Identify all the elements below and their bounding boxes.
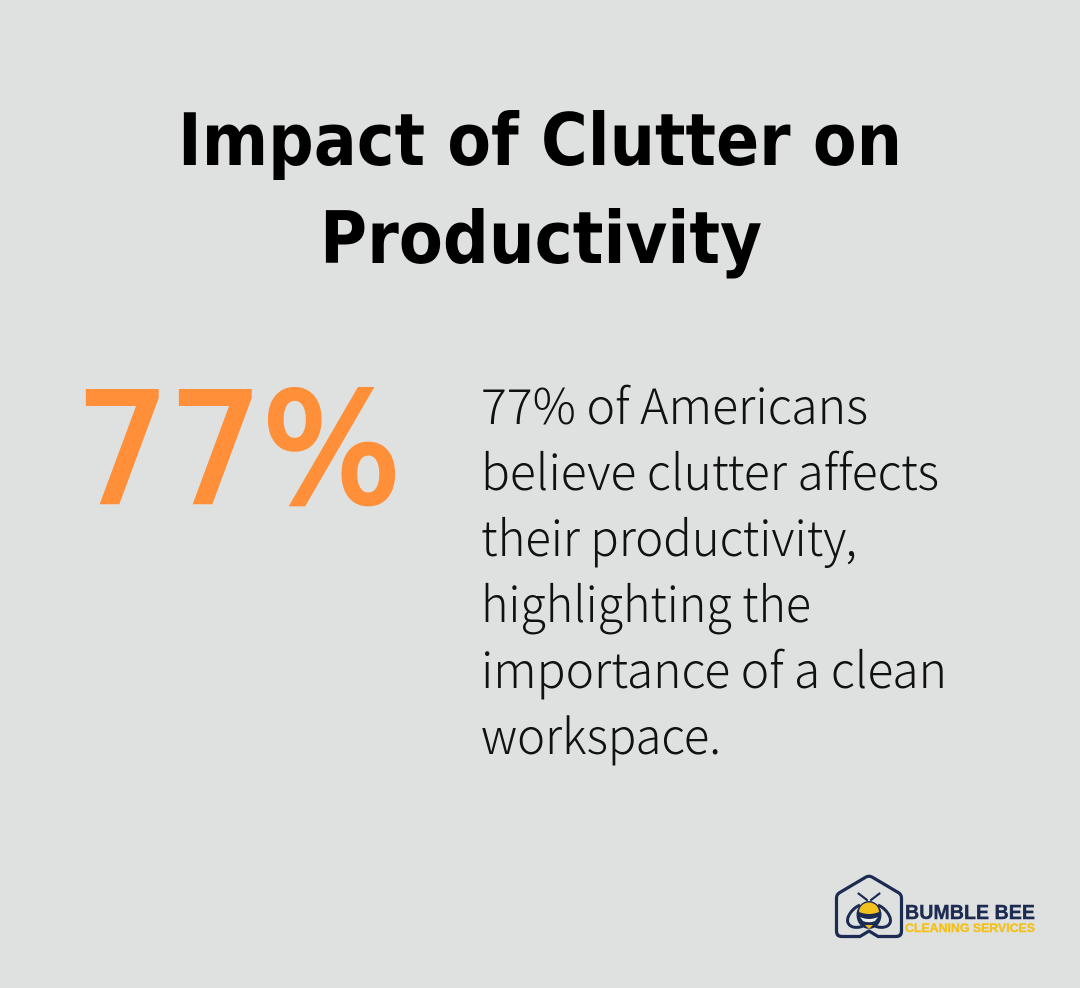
- description text: 77% of Americans: [481, 368, 868, 439]
- description text: their productivity,: [481, 500, 857, 571]
- big statistic: 77%: 77%: [76, 361, 401, 538]
- title: Impact of Clutter on: [178, 98, 902, 182]
- description text: [481, 368, 947, 769]
- description text: importance of a clean: [481, 632, 947, 703]
- description text: highlighting the: [481, 566, 811, 637]
- icon: house with bee: [836, 876, 902, 936]
- description text: workspace.: [481, 698, 721, 769]
- title: [178, 98, 902, 280]
- logo wordmark: BUMBLE BEE: [905, 901, 1035, 924]
- description text: believe clutter affects: [481, 434, 939, 505]
- title: Productivity: [320, 196, 762, 280]
- logo: Bumble Bee Cleaning Services: [836, 876, 1035, 936]
- logo tagline: CLEANING SERVICES: [905, 921, 1035, 935]
